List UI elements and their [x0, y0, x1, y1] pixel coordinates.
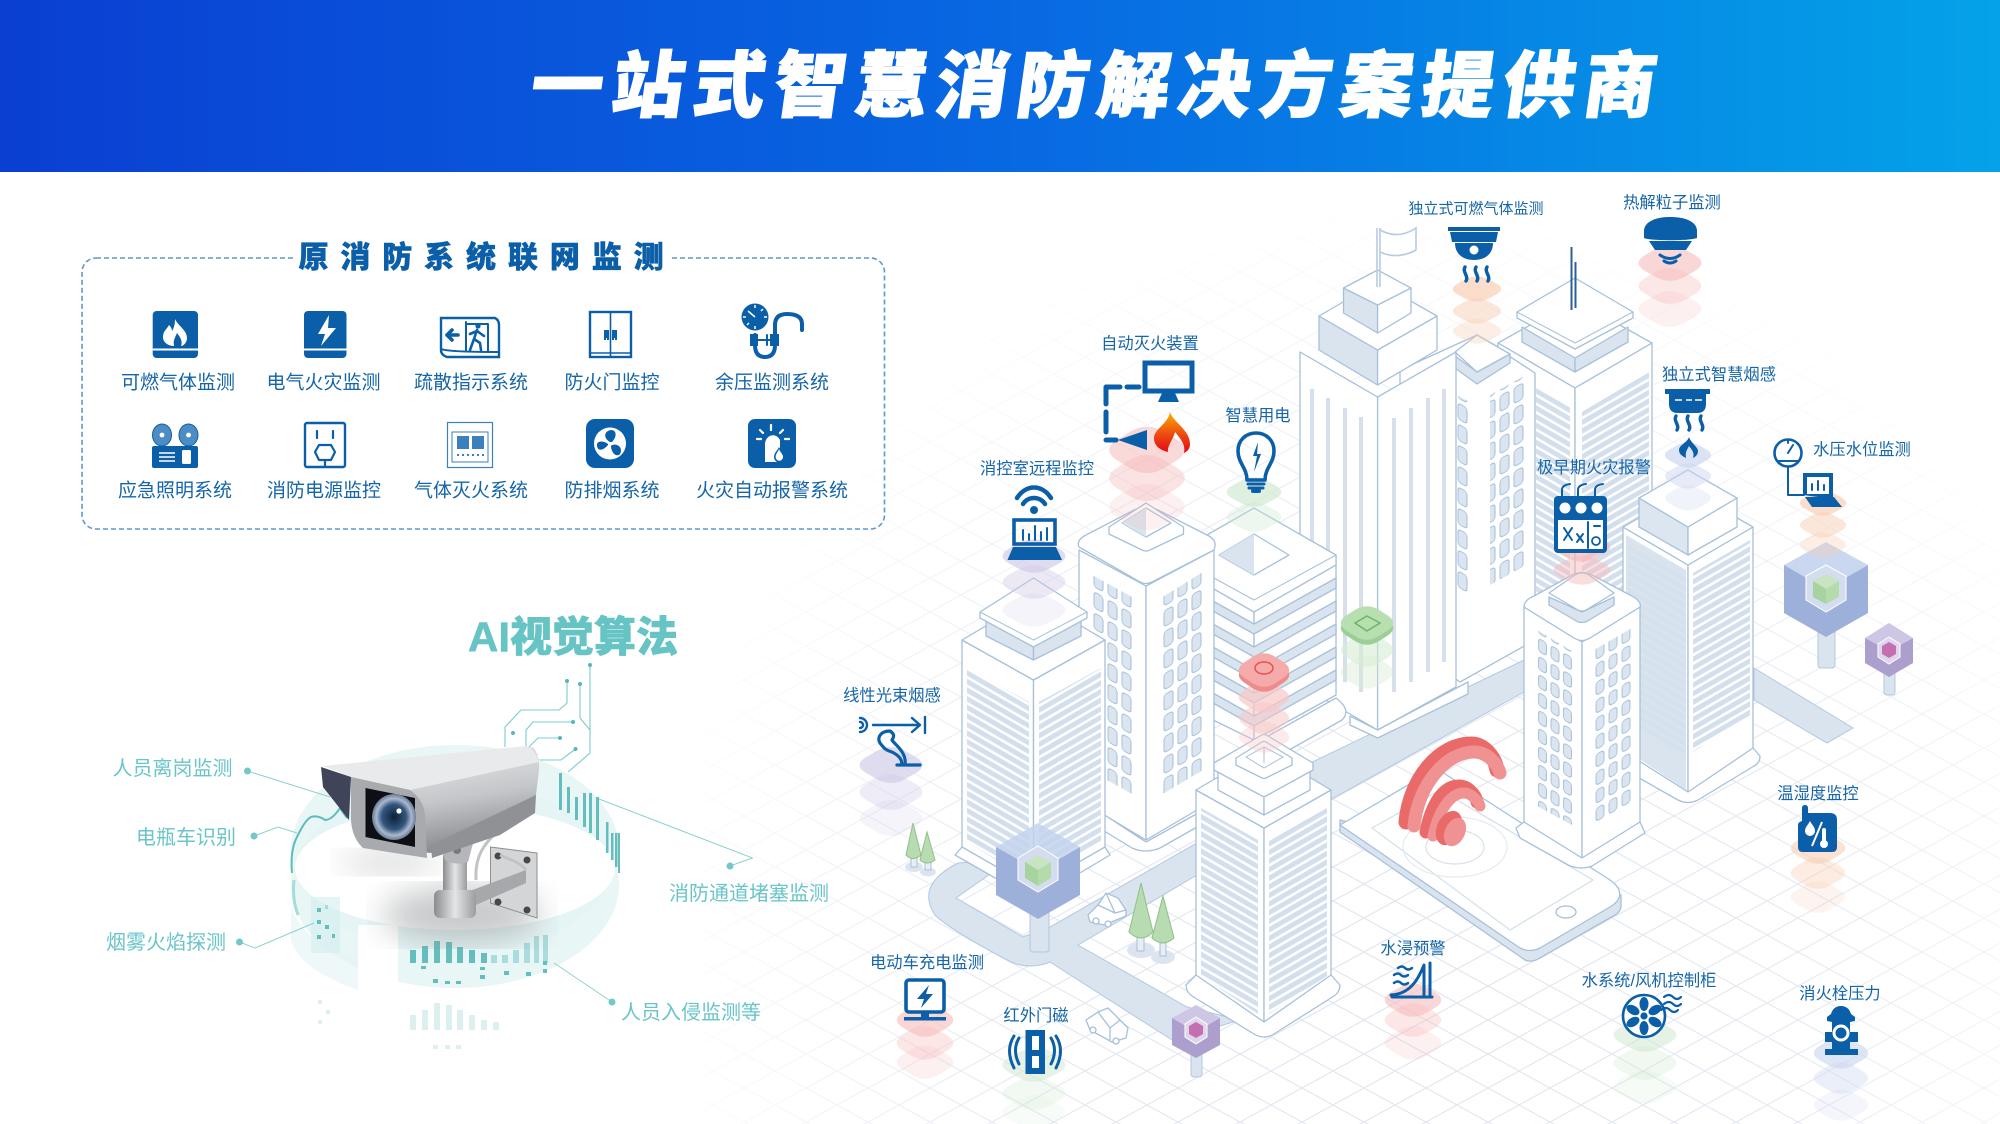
marker stack: ev charging	[897, 1003, 953, 1079]
icon: flood warning	[1391, 963, 1432, 997]
icon: smart power bulb	[1238, 433, 1274, 493]
icon: combustible gas	[153, 311, 198, 358]
label: 应急照明系统	[118, 480, 232, 502]
icon: emergency light	[152, 424, 198, 468]
icon: residual pressure	[742, 304, 802, 357]
antenna	[1572, 247, 1576, 310]
icon: water pressure gauge with laptop	[1774, 440, 1842, 507]
icon: hydrant	[1825, 1006, 1858, 1055]
icon: control room laptop	[1008, 488, 1062, 560]
marker stack: smart power	[1227, 477, 1281, 532]
cube sensor: left blue	[996, 823, 1080, 952]
icon: infrared door sensor	[1010, 1030, 1060, 1074]
front bars	[410, 935, 548, 984]
icon: auto extinguisher	[1106, 363, 1192, 453]
reflected bars	[318, 1000, 499, 1049]
hood inner	[321, 767, 351, 820]
icon: gas extinguishing panel	[448, 422, 492, 468]
icon: evacuation sign	[441, 318, 499, 357]
building: windowed tower behind	[1400, 335, 1535, 682]
building: right striped tower	[1623, 470, 1760, 802]
label: 防排烟系统	[564, 480, 660, 502]
building: windowed centre tower	[1078, 503, 1215, 851]
cube sensor: right blue	[1784, 542, 1868, 668]
icon: gas detector	[1448, 227, 1500, 281]
marker stack: smoke detector	[1665, 442, 1711, 511]
building: flag tower	[1300, 228, 1468, 738]
panel: original fire system monitoring	[82, 235, 884, 529]
label: 火灾自动报警系统	[696, 480, 848, 502]
scene labels: 消控室远程监控	[980, 460, 1094, 478]
marker stack: door sensor	[1002, 1048, 1066, 1124]
marker stack: pyrolysis	[1638, 245, 1702, 327]
callout: staff absence	[112, 757, 330, 797]
data ring	[291, 745, 620, 1049]
callout: e-bike recognition: 电瓶车识别	[136, 826, 236, 849]
cube sensor: right purple	[1865, 623, 1913, 695]
callout: smoke flame detection: 烟雾火焰探测	[106, 931, 226, 954]
scene labels: 红外门磁	[1003, 1007, 1069, 1025]
marker stacks	[860, 245, 1868, 1124]
car on road	[1088, 893, 1126, 927]
callout: e-bike recognition	[136, 826, 297, 849]
label: 电气火灾监测	[266, 372, 381, 394]
wave line	[292, 808, 347, 873]
marker stack: water pressure	[1800, 490, 1846, 558]
label: 消防电源监控	[267, 480, 381, 502]
isometric ground grid	[753, 306, 2000, 1124]
panel heading: 原消防系统联网监测	[298, 240, 676, 274]
label: 余压监测系统	[715, 372, 829, 394]
circuit lines	[505, 663, 592, 772]
icon: smoke exhaust fan	[586, 419, 634, 468]
marker stack: gas detector	[1453, 276, 1501, 344]
label: 防火门监控	[564, 372, 660, 394]
icon: fire door	[590, 312, 631, 357]
callout: intrusion	[554, 963, 761, 1024]
cube sensor: front purple	[1172, 1005, 1220, 1077]
flag	[1377, 228, 1416, 287]
scene labels: 热解粒子监测	[1623, 194, 1721, 212]
icon: electrical fire	[304, 311, 346, 358]
scene labels: 智慧用电	[1225, 407, 1291, 425]
scene labels: 独立式可燃气体监测	[1408, 200, 1544, 218]
right bars	[559, 773, 620, 873]
marker stack: fan cabinet	[1614, 1018, 1676, 1104]
floating red tag	[1239, 653, 1289, 753]
front housing	[351, 777, 427, 858]
scene labels: 线性光束烟感	[843, 687, 941, 705]
marker stack: auto extinguisher	[1109, 427, 1185, 530]
callout: smoke flame detection	[106, 923, 314, 954]
label: 可燃气体监测	[121, 372, 235, 394]
lens panel	[366, 788, 415, 847]
security camera	[321, 746, 539, 918]
scene labels: 独立式智慧烟感	[1662, 366, 1776, 384]
building: right windowed tower	[1516, 572, 1645, 868]
marker stack: beam smoke	[860, 747, 922, 836]
icon: smoke detector with flame	[1665, 389, 1710, 458]
icon: beam smoke detector	[860, 717, 925, 765]
floating green tag	[1341, 606, 1393, 689]
vertical facade stripes	[1312, 389, 1444, 692]
dot matrix	[311, 897, 340, 953]
scene labels	[843, 194, 1911, 1025]
building: antenna tower	[1498, 247, 1652, 650]
callout: fire lane blocked: 消防通道堵塞监测	[669, 882, 829, 905]
scene labels: 水压水位监测	[1813, 441, 1911, 459]
building: front left striped tower	[955, 578, 1110, 898]
icon: ev charging	[904, 980, 946, 1020]
wall mount	[490, 847, 537, 918]
icon: pyrolysis detector	[1644, 217, 1697, 263]
car on grid	[1086, 1008, 1128, 1044]
label: 疏散指示系统	[414, 372, 528, 394]
icon: fan cabinet	[1623, 995, 1681, 1037]
AI vision section	[106, 614, 829, 1049]
scene labels: 电动车充电监测	[870, 954, 984, 972]
icon: fire power supply	[305, 423, 345, 467]
marker stack: hydrant	[1814, 1037, 1868, 1121]
label: 气体灭火系统	[414, 480, 528, 502]
icon: fire alarm	[748, 419, 796, 468]
icon: early fire alarm	[1554, 484, 1607, 553]
marker stack: early fire alarm	[1554, 532, 1610, 585]
scene labels: 自动灭火装置	[1101, 335, 1199, 353]
scene labels: 消火栓压力	[1799, 985, 1881, 1003]
camera shadow	[382, 887, 542, 943]
AI labels	[106, 757, 829, 1024]
marker stack: temperature humidity	[1791, 832, 1845, 913]
trees	[905, 823, 1175, 964]
header banner	[0, 0, 2000, 172]
heading: AI视觉算法	[468, 614, 678, 660]
roads	[929, 660, 1853, 1040]
callout: intrusion: 人员入侵监测等	[621, 1001, 761, 1024]
scene labels: 水浸预警	[1380, 940, 1446, 958]
marker stack: control room	[1002, 539, 1066, 627]
building: front centre tower	[1186, 734, 1340, 1037]
callout: staff absence: 人员离岗监测	[112, 757, 232, 780]
building: stacked floors	[1172, 508, 1346, 770]
marker stack: flood	[1385, 983, 1441, 1060]
scene labels: 温湿度监控	[1777, 785, 1859, 803]
scene labels: 极早期火灾报警	[1537, 459, 1651, 477]
callout: fire lane blocked	[599, 799, 829, 905]
scene labels: 水系统/风机控制柜	[1582, 972, 1716, 990]
icon: temperature humidity	[1798, 805, 1837, 852]
roof hole	[1219, 534, 1289, 575]
smartphone platform	[1340, 770, 1621, 961]
title: 一站式智慧消防解决方案提供商	[526, 47, 1671, 127]
body	[351, 747, 539, 853]
red wifi symbol	[1406, 744, 1500, 850]
